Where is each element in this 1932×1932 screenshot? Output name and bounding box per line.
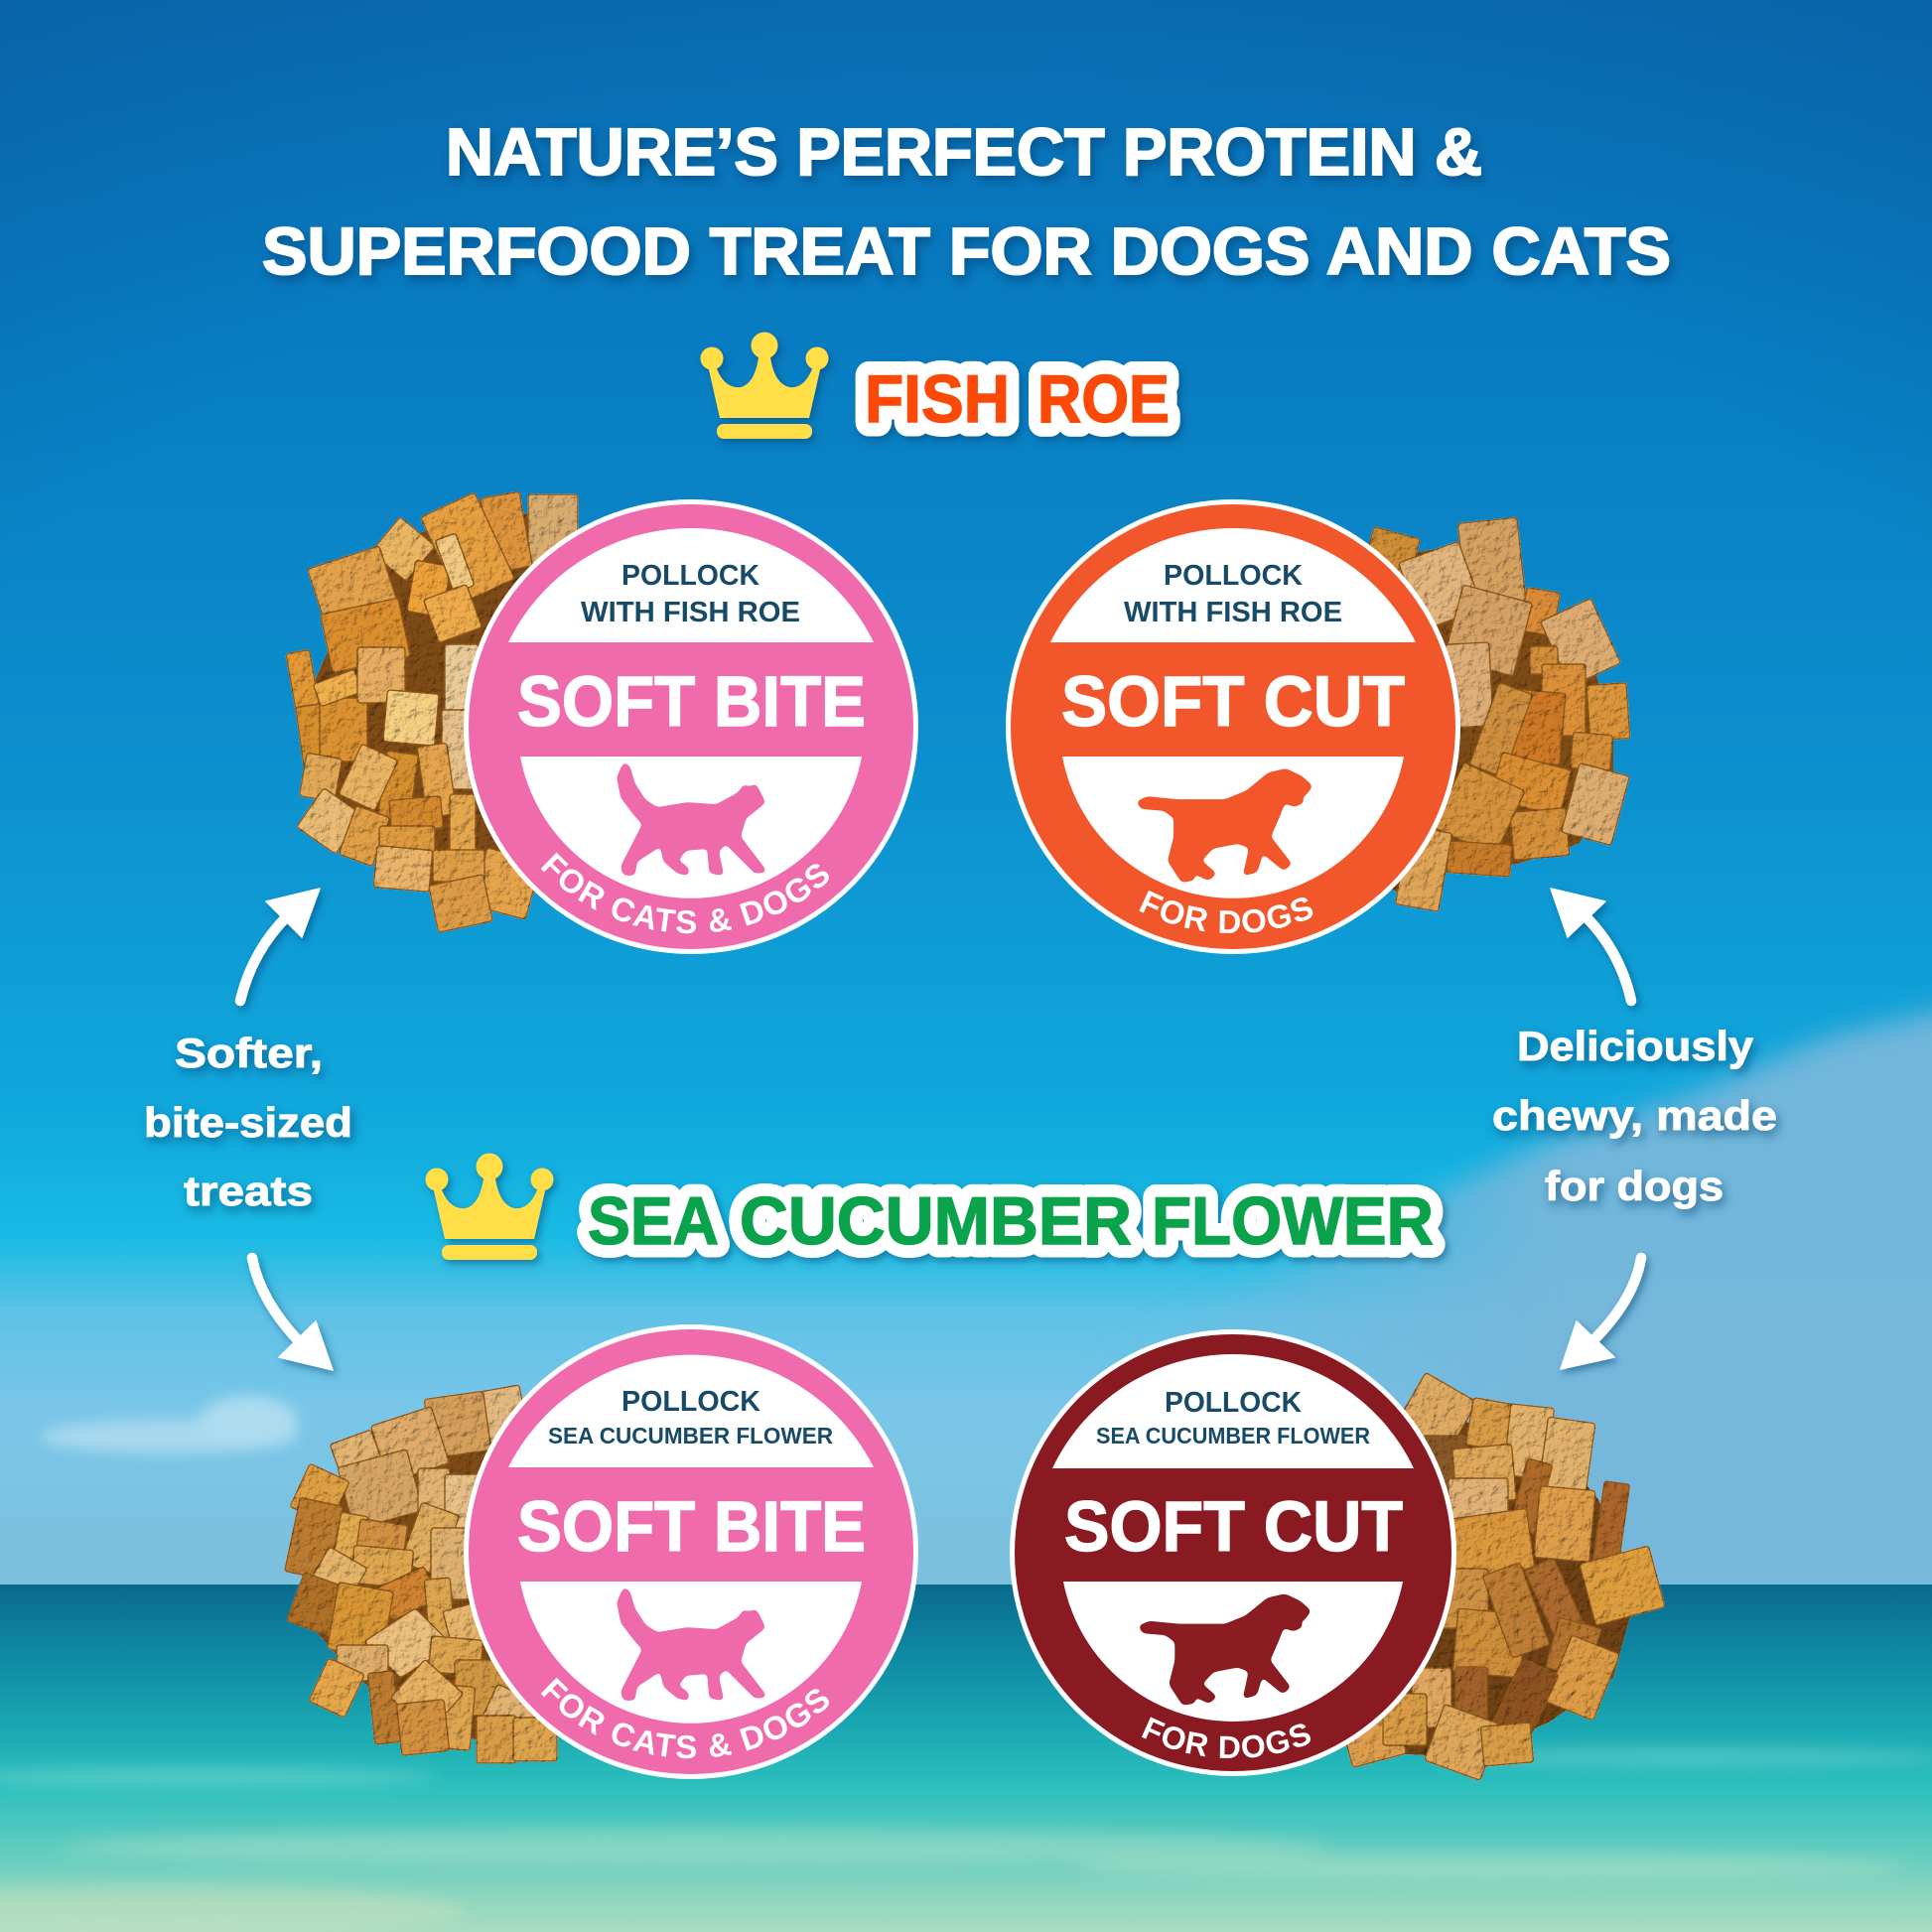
callout: softer bite-sized treats: Softer, [175, 1030, 323, 1076]
callout: softer bite-sized treats: bite-sized [144, 1099, 352, 1146]
icon: crown sea cucumber flower [425, 1154, 554, 1260]
food pile: sea cucumber soft cut [1341, 1372, 1665, 1780]
badge fill [1011, 504, 1455, 949]
icon: crown fish roe [701, 332, 828, 439]
heading: sea cucumber flower: CUCUMBER [740, 1183, 1132, 1259]
heading: sea cucumber flower: CUCUMBER [740, 1183, 1132, 1259]
heading: fish roe [865, 361, 1170, 437]
arrow: down right [1561, 1258, 1641, 1369]
bottom panel [1062, 757, 1404, 898]
icon: dog [1139, 770, 1311, 881]
top panel [1050, 528, 1416, 642]
audience label: FOR DOGS [1140, 890, 1312, 933]
background: small left cloud [40, 1396, 298, 1453]
protein label [548, 1386, 833, 1449]
heading: fish roe: FISH [865, 361, 1010, 437]
background: pale shallows [0, 1749, 1932, 1932]
audience label: FOR DOGS [1142, 1718, 1311, 1758]
background: right cloud [1092, 1003, 1932, 1588]
heading: sea cucumber flower [588, 1183, 1434, 1259]
badge ring [1010, 1329, 1456, 1776]
product name: SOFT BITE [517, 1488, 866, 1567]
arrow: down left [252, 1258, 333, 1370]
title [262, 115, 1671, 289]
callout: softer bite-sized treats: treats [184, 1168, 313, 1214]
badge fill [469, 1329, 913, 1774]
protein label [1124, 560, 1342, 628]
food pile: sea cucumber soft bite [285, 1385, 557, 1763]
product name: SOFT CUT [1061, 663, 1405, 742]
icon: dog [1141, 1595, 1309, 1704]
product name: SOFT BITE [517, 663, 866, 742]
callout: deliciously chewy made for dogs: for dogs [1545, 1163, 1724, 1209]
callout: deliciously chewy made for dogs: Deliciously [1517, 1023, 1754, 1069]
protein label [581, 560, 800, 628]
badge ring [1006, 499, 1460, 954]
protein label [1096, 1387, 1370, 1449]
audience label: FOR CATS & DOGS [540, 1678, 829, 1759]
icon: cat [619, 764, 764, 874]
audience label: FOR CATS & DOGS [540, 852, 829, 933]
protein label: WITH FISH ROE [581, 597, 800, 628]
badge: soft bite sea cucumber flower [464, 1324, 918, 1779]
protein label: POLLOCK [621, 1386, 760, 1418]
heading: fish roe: FISH [865, 361, 1010, 437]
callout: deliciously chewy made for dogs: chewy, made [1492, 1092, 1777, 1139]
food pile: fish roe soft cut [1362, 517, 1630, 911]
top panel [508, 1355, 874, 1467]
heading: sea cucumber flower: FLOWER [1152, 1183, 1434, 1259]
heading: sea cucumber flower: SEA [588, 1183, 719, 1259]
product name: SOFT CUT [1064, 1488, 1403, 1567]
callout: deliciously chewy made for dogs [1492, 1023, 1777, 1209]
protein label: POLLOCK [1165, 1387, 1302, 1419]
protein label: WITH FISH ROE [1124, 597, 1342, 628]
top panel [1052, 1354, 1414, 1468]
arrow: up left [240, 889, 320, 1001]
heading: sea cucumber flower: SEA [588, 1183, 719, 1259]
badge fill [1015, 1334, 1451, 1771]
bottom panel [520, 757, 862, 898]
icon: cat [619, 1589, 764, 1699]
protein label: SEA CUCUMBER FLOWER [548, 1423, 833, 1449]
heading: fish roe: ROE [1037, 361, 1170, 437]
top panel [508, 528, 874, 642]
badge ring [464, 499, 918, 954]
badge fill [469, 504, 913, 949]
background: sea [0, 1585, 1932, 1932]
bottom panel [1063, 1582, 1403, 1722]
title: NATURE’S PERFECT PROTEIN & [446, 115, 1482, 190]
bottom panel [520, 1582, 862, 1724]
protein label: POLLOCK [1164, 560, 1303, 592]
heading: fish roe: ROE [1037, 361, 1170, 437]
badge ring [464, 1324, 918, 1779]
protein label: SEA CUCUMBER FLOWER [1096, 1423, 1370, 1449]
badge: soft bite fish roe [464, 499, 918, 954]
arrow: up right [1551, 889, 1631, 1001]
callout: softer bite-sized treats [144, 1030, 352, 1214]
heading: sea cucumber flower: FLOWER [1152, 1183, 1434, 1259]
badge: soft cut fish roe [1006, 499, 1460, 954]
badge: soft cut sea cucumber flower [1010, 1329, 1456, 1776]
protein label: POLLOCK [621, 560, 759, 592]
title: SUPERFOOD TREAT FOR DOGS AND CATS [262, 214, 1671, 289]
food pile: fish roe soft bite [286, 491, 578, 932]
